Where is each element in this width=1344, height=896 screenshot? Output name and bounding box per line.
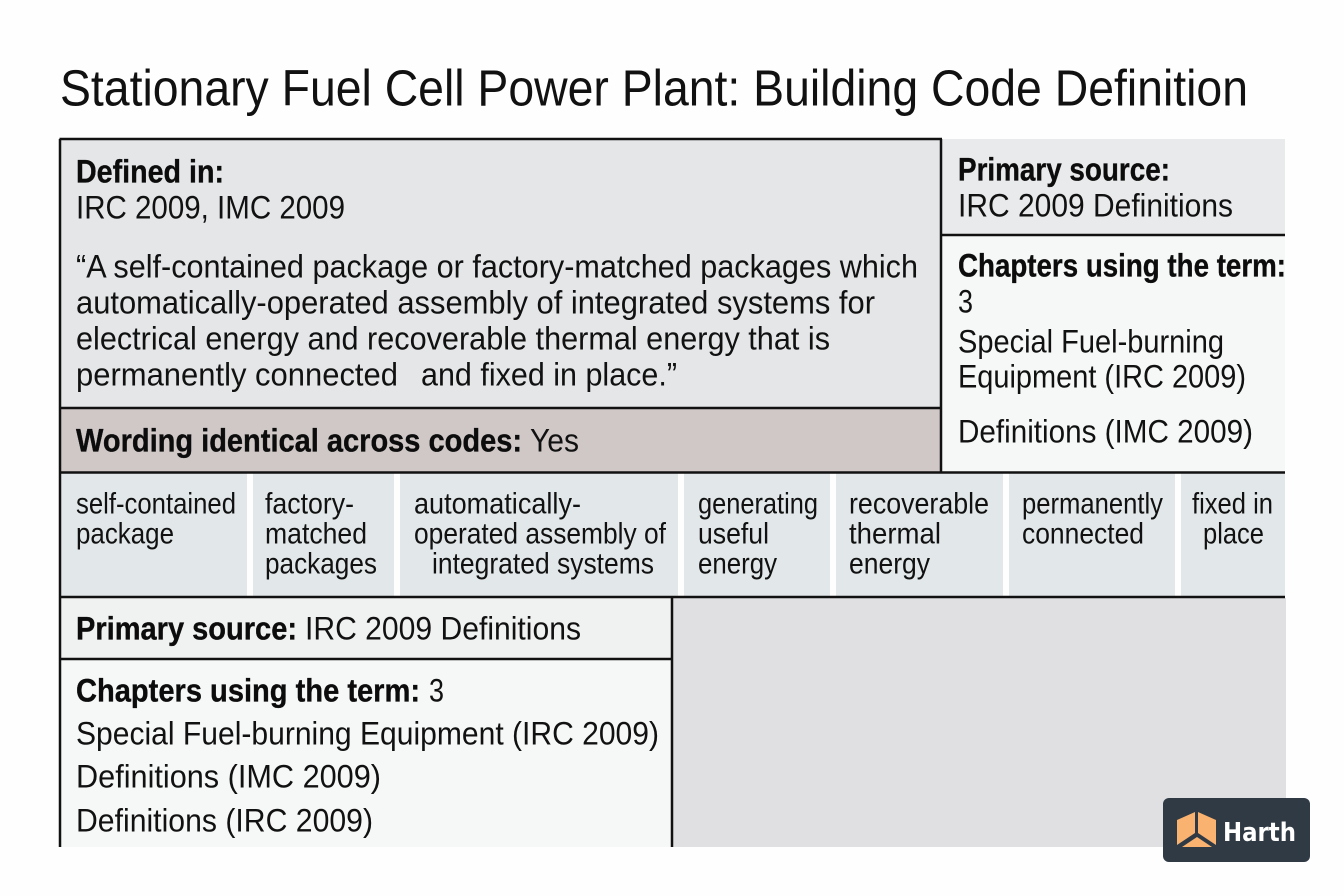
definition quote: and fixed in place.” — [421, 356, 677, 392]
panel: wording identical: Wording identical across codes: — [76, 422, 522, 458]
panel: primary source side: IRC 2009 Definitions — [958, 188, 1233, 224]
panel: chapters side: Chapters using the term: — [958, 248, 1286, 284]
term: fixed in place — [1181, 473, 1285, 597]
icon: cube — [1177, 812, 1216, 847]
term band — [60, 473, 1285, 597]
term: fixed in place: fixed in — [1192, 488, 1273, 520]
term: recoverable thermal energy — [836, 473, 1003, 597]
panel: primary source bottom: Primary source: — [76, 610, 297, 646]
term: permanently connected: permanently — [1022, 488, 1163, 520]
defined in label: Defined in: — [76, 154, 224, 190]
panel: primary source bottom — [60, 597, 672, 659]
panel: wording identical — [60, 409, 942, 473]
term: self-contained package — [60, 473, 247, 597]
term: automatically-operated assembly: integrated systems — [432, 548, 654, 580]
empty grey panel — [673, 598, 1286, 847]
panel: chapters side: Special Fuel-burning — [958, 324, 1224, 360]
term: automatically-operated assembly: automatically- — [414, 488, 581, 520]
panel: wording identical: Yes — [530, 422, 579, 458]
panel: chapters bottom: Chapters using the term: — [76, 672, 420, 708]
definition quote: automatically-operated assembly of integrated systems for — [76, 284, 875, 320]
term: recoverable thermal energy: energy — [849, 548, 930, 580]
panel: chapters bottom: Definitions (IRC 2009) — [76, 802, 373, 838]
panel: primary source side: Primary source: — [958, 152, 1170, 188]
panel: primary source side — [942, 139, 1285, 235]
term: recoverable thermal energy: recoverable — [849, 488, 989, 520]
term: fixed in place: place — [1203, 518, 1264, 550]
panel: chapters bottom: Special Fuel-burning Equipment (IRC 2009) — [76, 716, 659, 752]
term: self-contained package: self-contained — [76, 488, 236, 520]
logo: Harth — [1163, 798, 1310, 862]
term: generating useful energy: energy — [698, 548, 777, 580]
panel: primary source bottom: IRC 2009 Definitions — [305, 610, 581, 646]
panel: chapters side: Definitions (IMC 2009) — [958, 414, 1253, 450]
definition quote — [76, 248, 918, 392]
logo wordmark: Harth — [1223, 818, 1296, 848]
defined in label — [76, 154, 345, 226]
defined in label: IRC 2009, IMC 2009 — [76, 190, 345, 226]
term: automatically-operated assembly — [400, 473, 678, 597]
definition quote: electrical energy and recoverable thermal energy that is — [76, 320, 830, 356]
definition quote: permanently connected — [76, 356, 398, 392]
definition quote: “A self-contained package or factory-matched packages which — [76, 248, 918, 284]
panel: chapters side — [942, 236, 1286, 473]
term: factory-matched packages: factory- — [265, 488, 354, 520]
term: factory-matched packages: matched — [265, 518, 367, 550]
term: recoverable thermal energy: thermal — [849, 518, 941, 550]
panel: definition — [60, 139, 942, 409]
panel: chapters bottom — [60, 660, 672, 847]
term: self-contained package: package — [76, 518, 174, 550]
title: Stationary Fuel Cell Power Plant: Building Code Definition — [60, 60, 1248, 116]
term: generating useful energy: generating — [698, 488, 818, 520]
term: automatically-operated assembly: operated assembly of — [414, 518, 667, 550]
term: generating useful energy — [684, 473, 830, 597]
term: permanently connected — [1009, 473, 1175, 597]
term: factory-matched packages: packages — [265, 548, 377, 580]
term: permanently connected: connected — [1022, 518, 1144, 550]
term: factory-matched packages — [253, 473, 394, 597]
panel: chapters side: 3 — [958, 284, 973, 320]
panel: chapters bottom: 3 — [429, 672, 444, 708]
panel: chapters bottom: Definitions (IMC 2009) — [76, 758, 381, 794]
term: generating useful energy: useful — [698, 518, 769, 550]
panel: chapters side: Equipment (IRC 2009) — [958, 358, 1246, 394]
